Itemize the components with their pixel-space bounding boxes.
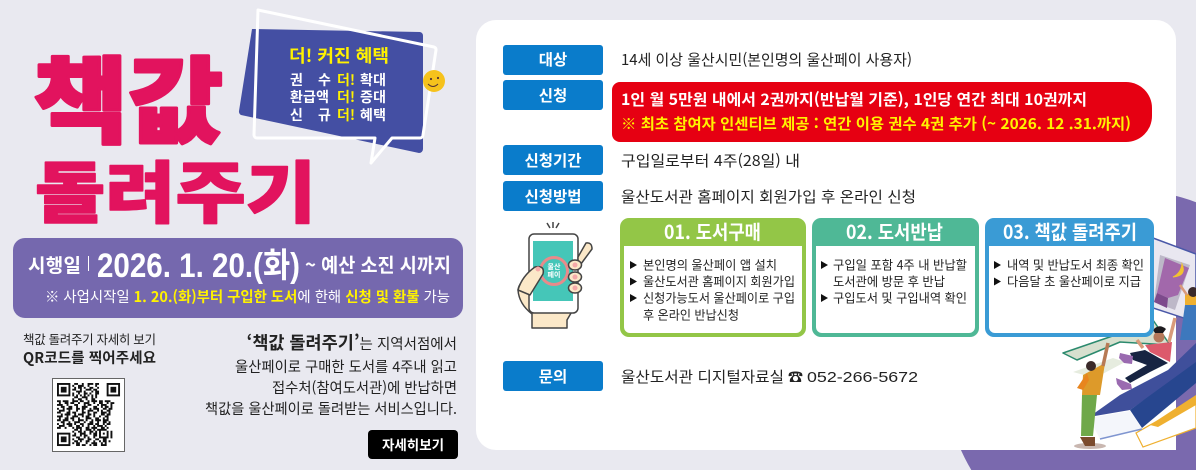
step card 2: 구입도서 및 구입내역 확인 [833, 288, 967, 306]
step card 2: 도서관에 방문 후 반납 [833, 271, 945, 290]
speech bubble: bigger benefits [239, 10, 445, 163]
speech bubble: bigger benefits: 증대 [360, 87, 386, 107]
description text [205, 330, 457, 419]
step card 3: 다음달 초 울산페이로 지급 [1007, 271, 1141, 290]
button: details [368, 430, 458, 459]
book: large blue book [1089, 343, 1196, 439]
date banner: ※ 사업시작일 1. 20.(화)부터 구입한 도서에 한해 신청 및 환불 가능 [45, 286, 450, 307]
label: 신청기간: 신청기간 [524, 149, 582, 171]
QR code [52, 378, 124, 452]
date banner: ~ 예산 소진 시까지 [305, 249, 451, 278]
panel: white information card [476, 20, 1176, 450]
QR caption: 책값 돌려주기 자세히 보기 [23, 329, 156, 348]
text: target: 14세 이상 울산시민(본인명의 울산페이 사용자) [621, 49, 912, 70]
text: contact: ☎ [788, 366, 803, 387]
icon: hand holding phone: 페이 [548, 270, 560, 280]
person: woman in blue jeans [1180, 285, 1196, 340]
speech bubble: bigger benefits: 신 [290, 105, 303, 125]
label: 문의 [503, 361, 603, 391]
speech bubble: bigger benefits: 확대 [360, 70, 386, 90]
step card 3: 03. 책값 돌려주기 [1003, 216, 1137, 245]
label: 신청 [503, 80, 603, 110]
label: 대상: 대상 [539, 48, 567, 70]
button: details: 자세히보기 [382, 434, 444, 454]
callout: red application limits: 1인 월 5만원 내에서 2권까지(반납월 기준), 1인당 연간 최대 10권까지 [621, 88, 1087, 110]
QR caption: QR코드를 찍어주세요 [23, 347, 156, 368]
speech bubble: bigger benefits: 혜택 [360, 105, 386, 125]
label: 신청: 신청 [539, 84, 567, 106]
book: green book [1063, 320, 1170, 378]
label: 신청방법 [503, 181, 603, 211]
label: 신청기간 [503, 145, 603, 175]
label: 대상 [503, 45, 603, 75]
date banner [13, 238, 463, 318]
text: application method: 울산도서관 홈페이지 회원가입 후 온라인 신청 [621, 186, 916, 207]
date banner: 시행일 [28, 251, 81, 278]
step card 1: 본인명의 울산페이 앱 설치 [643, 254, 777, 274]
description text: 울산페이로 구매한 도서를 4주내 읽고 [235, 356, 457, 377]
step card 3: 내역 및 반납도서 최종 확인 [1007, 254, 1144, 274]
speech bubble: bigger benefits: 더! 커진 혜택 [289, 43, 389, 68]
text: contact: 울산도서관 디지털자료실 [621, 366, 784, 387]
step card 2: 02. 도서반납 [846, 216, 943, 245]
text: application period: 구입일로부터 4주(28일) 내 [621, 150, 800, 171]
step card 3 [985, 216, 1154, 337]
speech bubble: bigger benefits: 더! [337, 70, 355, 90]
step card 1: 01. 도서구매 [664, 216, 761, 245]
QR caption [23, 329, 156, 368]
person: woman in pink shirt [1116, 318, 1175, 390]
title: 책값 돌려주기: 책값 [33, 27, 223, 163]
icon: smiley [423, 70, 445, 92]
label: 신청방법: 신청방법 [524, 185, 582, 207]
speech bubble: bigger benefits: 권 [290, 70, 303, 90]
callout: red application limits [612, 82, 1152, 142]
title: 책값 돌려주기: 돌려주기 [35, 140, 316, 237]
date banner: 2026. 1. 20.(화) [97, 247, 300, 285]
text: contact: 052-266-5672 [807, 369, 918, 386]
step card 1: 후 온라인 반납신청 [643, 304, 739, 324]
step card 1 [620, 216, 806, 337]
step card 2 [812, 216, 979, 337]
person: man in yellow shirt [1074, 343, 1108, 449]
step card 2: 구입일 포함 4주 내 반납할 [833, 254, 967, 274]
description text: ‘책값 돌려주기’는 지역서점에서 [247, 330, 457, 355]
title: 책값 돌려주기 [33, 27, 316, 237]
description text: 책값을 울산페이로 돌려받는 서비스입니다. [205, 398, 457, 419]
book: open picture book with moon [1150, 238, 1196, 322]
speech bubble: bigger benefits: 수 [318, 70, 331, 90]
step card 1: 울산도서관 홈페이지 회원가입 [643, 271, 795, 290]
label: 문의: 문의 [539, 365, 567, 387]
speech bubble: bigger benefits: 규 [318, 105, 331, 125]
book: yellow book [1136, 395, 1196, 447]
icon: hand holding phone [518, 222, 592, 328]
step card 1: 신청가능도서 울산페이로 구입 [643, 288, 795, 306]
illustration: people climbing books [1063, 238, 1196, 449]
speech bubble: bigger benefits: 환급액 [290, 87, 329, 107]
icon: hand holding phone: 울산 [548, 262, 561, 272]
speech bubble: bigger benefits: 더! [337, 87, 355, 107]
description text: 접수처(참여도서관)에 반납하면 [272, 377, 457, 398]
text: contact [621, 366, 918, 387]
speech bubble: bigger benefits: 더! [337, 105, 355, 125]
callout: red application limits: ※ 최초 참여자 인센티브 제공 : 연간 이용 권수 4권 추가 (~ 2026. 12 .31.까지) [621, 113, 1131, 134]
